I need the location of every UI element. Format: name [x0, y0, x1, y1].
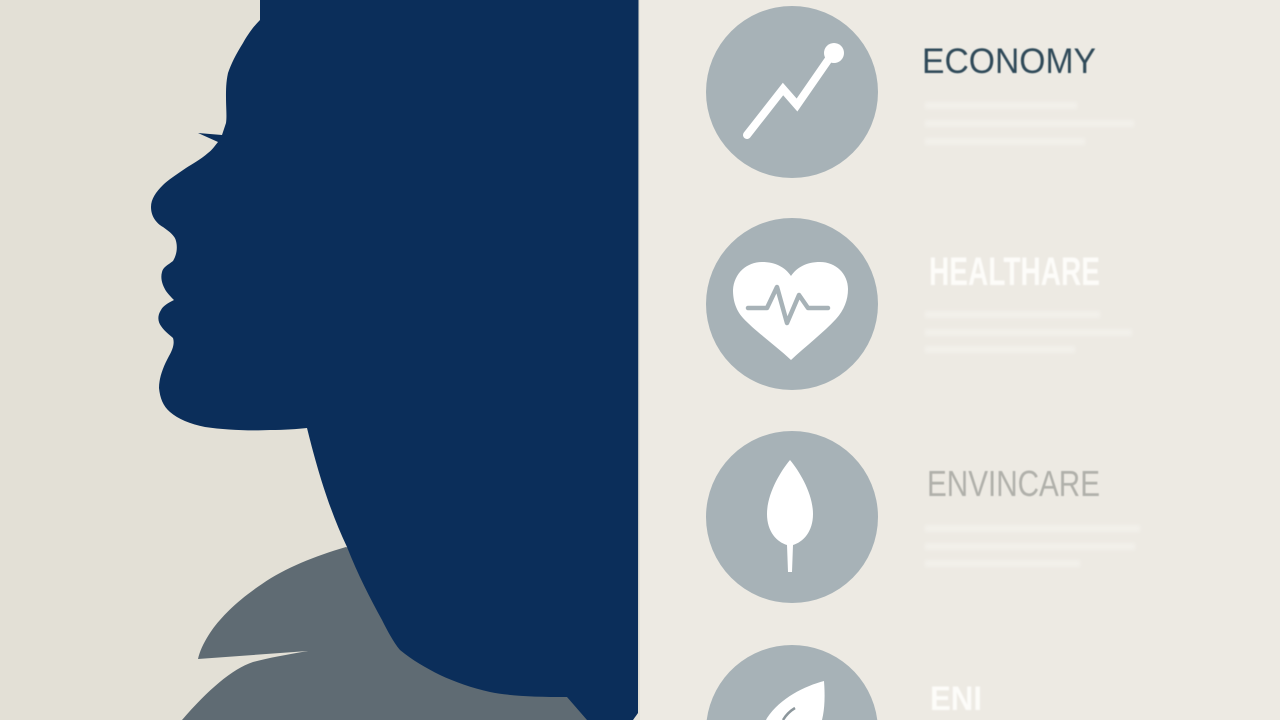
economy row [706, 6, 1134, 178]
icon: leaf drop [706, 431, 878, 603]
left background panel [0, 0, 640, 720]
shoulder: grey garment [182, 547, 600, 720]
healthcare row [706, 218, 1132, 390]
icon: heart with pulse [706, 218, 878, 390]
heading: cropped: ENI [930, 680, 982, 718]
icon: leaf [707, 645, 877, 720]
icon: rising line chart [706, 6, 878, 178]
fourth row, cropped [707, 645, 982, 720]
heading: environment: ENVINCARE [927, 463, 1100, 504]
illegible faint body copy [925, 102, 1134, 145]
right background panel [640, 0, 1280, 720]
head silhouette [151, 0, 638, 720]
illegible faint body copy [925, 311, 1132, 353]
heading: economy: ECONOMY [922, 42, 1096, 81]
environment row [706, 431, 1140, 603]
heading: healthcare: HEALTHARE [929, 250, 1100, 294]
illegible faint body copy [925, 525, 1140, 567]
